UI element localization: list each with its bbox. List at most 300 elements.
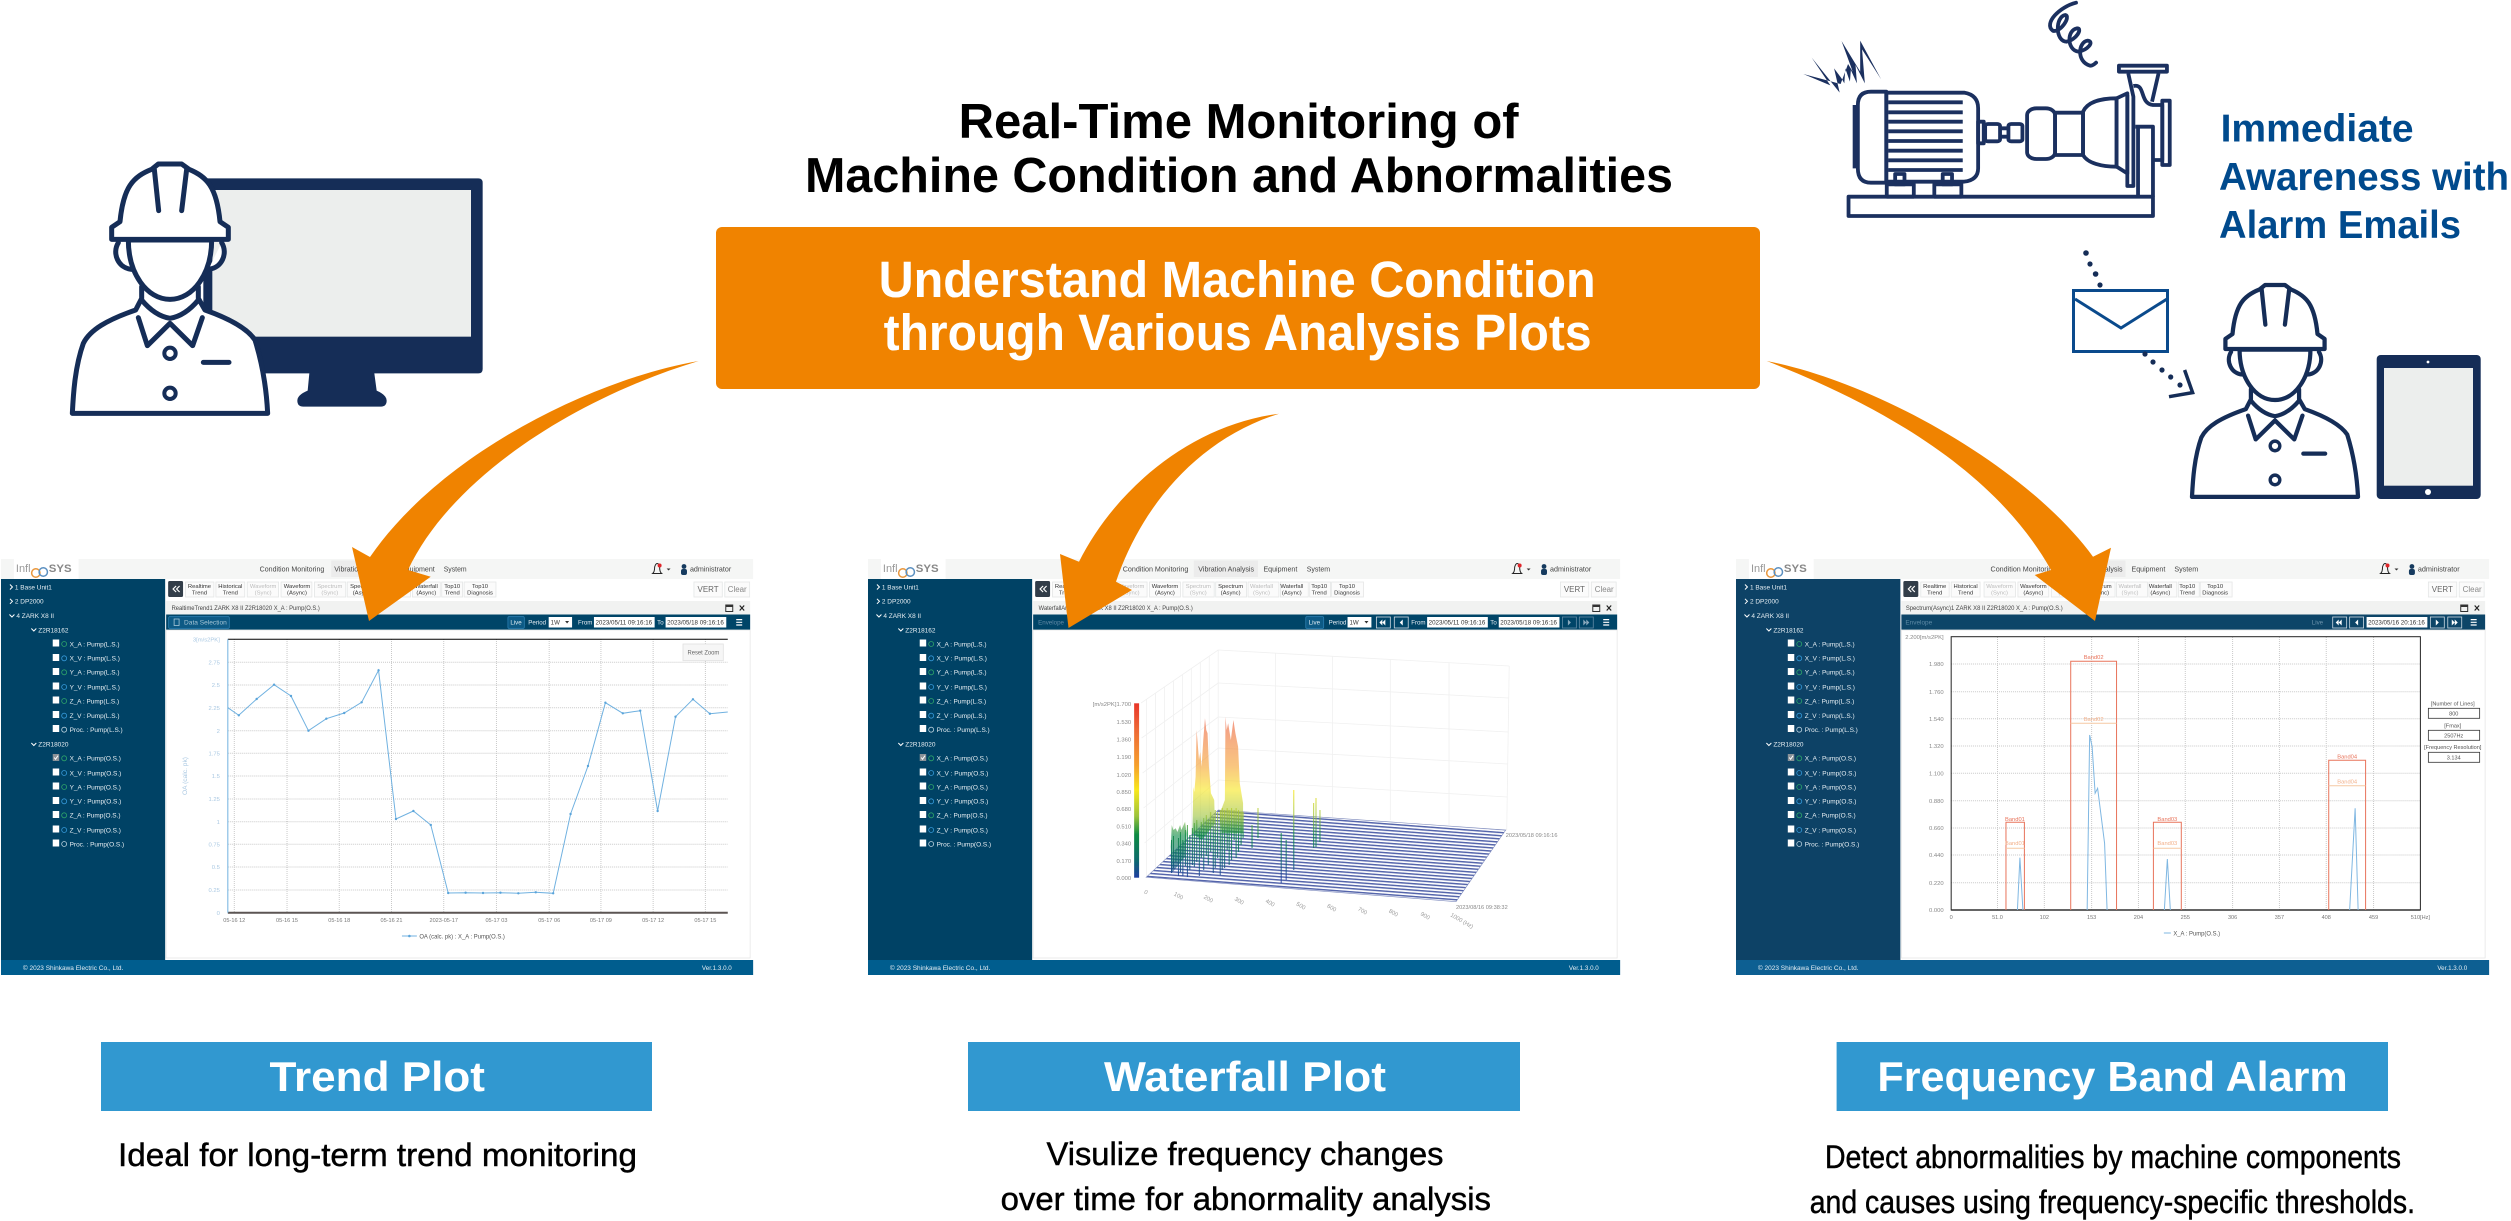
toolbar: Historical — [1085, 584, 1109, 590]
y axis labels: 0.440 — [1929, 853, 1944, 859]
footer bar — [868, 960, 1620, 975]
sidebar tree: Y_V : Pump(O.S.) — [1805, 799, 1856, 806]
toolbar: Trend — [1059, 590, 1074, 597]
sidebar tree: X_V : Pump(L.S.) — [70, 656, 120, 663]
toolbar: Trend — [1312, 590, 1327, 597]
toolbar: Waterfall — [1250, 584, 1273, 590]
toolbar: VERT — [2432, 585, 2453, 594]
y axis labels: 1.760 — [1929, 690, 1944, 696]
x axis labels — [223, 918, 716, 924]
sidebar tree: Proc. : Pump(O.S.) — [70, 841, 124, 848]
chart legend: OA (calc. pk) : X_A : Pump(O.S.) — [419, 933, 505, 941]
frequency labels — [1143, 890, 1474, 930]
toolbar: (Async) — [1221, 590, 1241, 597]
control bar: 2023/05/16 20:16:16 — [2368, 619, 2425, 627]
icon: worker at monitor — [72, 164, 483, 413]
toolbar: Spectrum — [1218, 584, 1243, 590]
toolbar: Waveform — [2020, 584, 2047, 590]
toolbar: Trend — [445, 590, 460, 597]
sidebar tree: X_A : Pump(L.S.) — [937, 641, 986, 648]
toolbar — [1035, 581, 1616, 597]
panel: trend plot screenshot — [1, 559, 753, 975]
sidebar tree: Z2R18162 — [1773, 627, 1804, 634]
control bar: From — [1411, 619, 1426, 627]
toolbar: Historical — [1954, 584, 1978, 590]
window title row: WaterfallAnalysis1 ZARK X8 II Z2R18020 X_A : Pump(O.S.) — [1039, 605, 1193, 612]
toolbar: Waterfall — [2149, 584, 2172, 590]
y axis labels: 0.25 — [208, 888, 221, 894]
toolbar: Diagnosis — [467, 590, 493, 597]
x axis labels: 153 — [2087, 915, 2096, 921]
sidebar tree: Y_A : Pump(O.S.) — [937, 784, 988, 791]
app header: Vibration Analysis — [334, 566, 391, 574]
title: Machine Condition and Abnormalities — [805, 148, 1673, 203]
app header: SYS — [1784, 563, 1807, 575]
toolbar: Top10 — [1311, 584, 1328, 590]
sidebar tree: Proc. : Pump(L.S.) — [937, 727, 990, 734]
x axis labels: 459 — [2369, 915, 2378, 921]
control bar: 1W — [1350, 619, 1359, 627]
icon: noisy pump machine — [1803, 3, 2170, 216]
toolbar: (Sync) — [1253, 590, 1270, 597]
frequency labels: 1000 (Hz) — [1449, 913, 1474, 930]
y axis labels: 0 — [217, 911, 221, 917]
sidebar tree: Y_V : Pump(L.S.) — [70, 684, 120, 691]
app header: SYS — [916, 563, 939, 575]
panel: waterfall plot screenshot — [868, 559, 1620, 975]
value labels: 0.340 — [1116, 842, 1132, 848]
y axis labels: 1.980 — [1929, 662, 1944, 668]
sidebar tree: X_A : Pump(L.S.) — [70, 641, 119, 648]
x axis labels: 05-16 12 — [223, 918, 245, 924]
3D waterfall chart — [1033, 630, 1617, 958]
app header: administrator — [1550, 566, 1592, 574]
y axis labels: 1.540 — [1929, 717, 1944, 723]
y axis labels: 0.220 — [1929, 881, 1944, 887]
control bar: Live — [1309, 619, 1321, 627]
arrow: to trend plot — [352, 361, 699, 621]
toolbar — [168, 581, 750, 597]
value labels: 0.850 — [1116, 790, 1132, 796]
toolbar — [1903, 581, 2484, 597]
icon: tablet — [2377, 355, 2481, 499]
app header: Equipment — [2131, 566, 2165, 574]
toolbar: Diagnosis — [2202, 590, 2228, 597]
control bar — [166, 614, 750, 630]
toolbar: (Sync) — [1991, 590, 2008, 597]
app header: Condition Monitoring — [1991, 566, 2056, 574]
alarm bands — [2005, 655, 2366, 910]
floor grid — [1146, 810, 1506, 902]
footer bar: Ver.1.3.0.0 — [702, 965, 732, 972]
control bar: Period — [528, 619, 547, 627]
sidebar tree: Z_A : Pump(L.S.) — [70, 698, 119, 705]
app header: Vibration Analysis — [2067, 566, 2123, 574]
window title row: Spectrum(Async)1 ZARK X8 II Z2R18020 X_A : Pump(O.S.) — [1906, 605, 2063, 612]
sidebar tree: Z2R18162 — [38, 627, 69, 634]
toolbar: Realtime — [188, 584, 211, 590]
control bar: Envelope — [1905, 619, 1933, 627]
frequency labels: 500 — [1295, 902, 1306, 912]
control bar: To — [657, 619, 664, 627]
y axis labels — [193, 637, 221, 917]
frequency labels: 400 — [1264, 899, 1275, 909]
toolbar: Realtime — [1055, 584, 1078, 590]
toolbar: Waveform — [1152, 584, 1178, 590]
heading: waterfall plot — [968, 1042, 1520, 1111]
app header: System — [1307, 566, 1330, 574]
x axis labels — [1950, 915, 2430, 921]
toolbar: Clear — [1595, 585, 1614, 594]
control bar: 2023/05/18 09:16:16 — [1500, 619, 1558, 627]
x axis labels: 2023-05-17 — [429, 918, 458, 924]
y axis labels: 0.75 — [208, 842, 221, 849]
y axis labels: 1.320 — [1929, 744, 1944, 750]
y axis labels: 2.200[m/s2PK] — [1905, 635, 1944, 641]
toolbar: (Async) — [287, 590, 307, 597]
x axis labels: 05-16 21 — [381, 918, 402, 924]
sidebar tree: Proc. : Pump(L.S.) — [1805, 727, 1858, 734]
spectrum info boxes: [Number of Lines] — [2431, 701, 2475, 708]
frequency labels: 700 — [1356, 907, 1368, 917]
sidebar tree: Z2R18020 — [1773, 742, 1804, 749]
sidebar tree: 4 ZARK X8 II — [1751, 613, 1789, 620]
sidebar tree: Z_A : Pump(L.S.) — [1805, 698, 1854, 705]
heading: trend plot — [101, 1042, 652, 1111]
value labels: 1.360 — [1116, 737, 1132, 744]
toolbar: (Async) — [353, 590, 373, 597]
x axis labels: 05-17 09 — [590, 918, 612, 924]
value labels: 1.020 — [1116, 773, 1132, 779]
icon: spring vibration squiggle — [2050, 3, 2096, 66]
toolbar: Historical — [218, 584, 242, 590]
toolbar: Waterfall — [1280, 584, 1303, 590]
footer bar: © 2023 Shinkawa Electric Co., Ltd. — [1758, 964, 1859, 972]
sidebar tree: Proc. : Pump(O.S.) — [1805, 841, 1859, 848]
sidebar tree: 1 Base Unit1 — [15, 584, 52, 591]
frequency labels: 300 — [1233, 897, 1244, 907]
y axis labels: 2 — [217, 729, 220, 735]
sidebar tree: Y_A : Pump(L.S.) — [1805, 670, 1855, 677]
x axis labels: 05-17 15 — [694, 918, 716, 924]
sidebar tree: 4 ZARK X8 II — [883, 613, 921, 620]
sidebar tree: X_A : Pump(O.S.) — [1805, 756, 1856, 763]
alarm bands: Band04 — [2337, 754, 2358, 761]
description: frequency band alarm — [1810, 1139, 2415, 1220]
spectrum lines — [2017, 735, 2358, 910]
app header: SYS — [49, 563, 72, 575]
heading: alarm emails — [2219, 108, 2509, 247]
toolbar: (Sync) — [2122, 590, 2139, 597]
sidebar tree: 1 Base Unit1 — [882, 584, 919, 591]
orange callout box — [716, 227, 1760, 389]
sidebar tree — [1, 579, 165, 960]
sidebar tree: Z_V : Pump(O.S.) — [70, 827, 121, 834]
title — [805, 94, 1673, 203]
reset zoom button: Reset Zoom — [687, 650, 719, 657]
alarm bands: Band03 — [2157, 841, 2177, 847]
toolbar: VERT — [698, 585, 719, 594]
sidebar tree: 2 DP2000 — [1750, 599, 1779, 606]
sidebar tree: 2 DP2000 — [15, 599, 44, 606]
value labels: 0.000 — [1116, 876, 1132, 882]
arrow: dotted path to worker — [2142, 351, 2193, 397]
toolbar: Waveform — [1118, 584, 1144, 590]
frequency labels: 600 — [1326, 904, 1337, 914]
x axis labels: 102 — [2040, 915, 2049, 921]
heading: alarm emails: Alarm Emails — [2219, 204, 2461, 247]
toolbar: Spectrum — [317, 584, 342, 590]
app header: Condition Monitoring — [1123, 566, 1189, 574]
y axis labels: 2.25 — [208, 706, 221, 712]
sidebar tree: Z_A : Pump(O.S.) — [937, 813, 988, 820]
y axis labels: 0.5 — [212, 865, 221, 871]
app header: System — [444, 566, 467, 574]
y axis labels: 1.5 — [212, 774, 221, 780]
y axis labels: 2.5 — [212, 683, 221, 689]
sidebar tree: X_A : Pump(O.S.) — [937, 756, 988, 763]
toolbar: Waveform — [1986, 584, 2013, 590]
arrow: to frequency band alarm — [1767, 361, 2111, 621]
y axis labels: 0.880 — [1929, 799, 1944, 805]
spectral spikes — [1171, 790, 1320, 883]
orange callout box: Understand Machine Condition — [879, 251, 1596, 308]
x axis labels: 05-17 12 — [642, 918, 664, 924]
alarm bands: Band01 — [2005, 841, 2025, 847]
app header: administrator — [2418, 566, 2460, 574]
sidebar tree: Z_V : Pump(L.S.) — [70, 713, 119, 720]
value labels: 1.190 — [1116, 755, 1132, 761]
sidebar tree: X_V : Pump(O.S.) — [1805, 770, 1856, 777]
sidebar tree: Z_V : Pump(L.S.) — [937, 713, 986, 720]
toolbar: Top10 — [2179, 584, 2196, 590]
surface peaks — [1171, 717, 1243, 873]
toolbar: (Async) — [1155, 590, 1175, 597]
control bar: Envelope — [1038, 619, 1065, 627]
sidebar tree: X_A : Pump(L.S.) — [1805, 641, 1855, 648]
description: trend plot: Ideal for long-term trend monitoring — [118, 1137, 637, 1173]
sidebar tree: Y_A : Pump(O.S.) — [70, 784, 121, 791]
frequency labels: 900 — [1419, 912, 1430, 922]
value labels: 0.510 — [1116, 824, 1132, 831]
sidebar tree: Z_A : Pump(L.S.) — [937, 698, 986, 705]
x axis labels: 05-16 15 — [276, 918, 298, 924]
title: Real-Time Monitoring of — [959, 94, 1519, 149]
icon: desktop monitor — [203, 178, 483, 407]
date labels — [1456, 833, 1557, 911]
toolbar: (Sync) — [321, 590, 338, 597]
toolbar: VERT — [1564, 585, 1585, 594]
spectrum info boxes: [Frequency Resolution] — [2424, 745, 2482, 751]
value labels — [1093, 702, 1132, 882]
toolbar: Clear — [728, 585, 747, 594]
y axis labels: 1.75 — [208, 751, 221, 758]
toolbar: Trend — [1927, 590, 1942, 597]
footer bar: © 2023 Shinkawa Electric Co., Ltd. — [23, 964, 124, 972]
alarm bands: Band01 — [2005, 817, 2025, 823]
date labels: 2023/05/18 09:16:16 — [1506, 833, 1557, 839]
value labels: 0.680 — [1116, 807, 1132, 813]
spectrum info boxes: 2507Hz — [2444, 733, 2464, 740]
control bar: To — [1490, 619, 1497, 627]
app header: administrator — [690, 566, 732, 574]
icon: worker with tablet — [2192, 285, 2358, 497]
toolbar: Trend — [192, 590, 207, 597]
spectrum info boxes: 3.134 — [2447, 755, 2461, 762]
toolbar: Trend — [1958, 590, 1973, 597]
heading: frequency band alarm — [1837, 1042, 2388, 1111]
sidebar tree: Z_V : Pump(O.S.) — [937, 827, 988, 834]
toolbar: Diagnosis — [1334, 590, 1360, 597]
spectrum info boxes: [Fmax] — [2444, 723, 2462, 730]
x axis labels: 05-17 03 — [485, 918, 507, 924]
sidebar tree: Z_A : Pump(O.S.) — [70, 813, 121, 820]
toolbar: (Sync) — [255, 590, 272, 597]
control bar: 2023/05/18 09:16:16 — [667, 619, 724, 627]
sidebar tree: 4 ZARK X8 II — [16, 613, 54, 620]
trend line chart: OA (calc. pk) — [182, 757, 189, 795]
sidebar tree: Z_V : Pump(L.S.) — [1805, 713, 1855, 720]
y axis labels: 0.000 — [1929, 908, 1944, 914]
toolbar: (Async) — [2023, 590, 2043, 597]
control bar: 2023/05/11 09:16:16 — [595, 619, 653, 627]
toolbar: Waterfall — [2119, 584, 2141, 590]
heading: frequency band alarm: Frequency Band Alarm — [1877, 1053, 2348, 1100]
toolbar: Realtime — [1923, 584, 1946, 590]
toolbar: (Async) — [2150, 590, 2170, 597]
app header: Equipment — [1263, 566, 1297, 574]
app header: System — [2174, 566, 2199, 574]
machine body — [1849, 66, 2170, 216]
y axis labels: 1 — [217, 820, 220, 826]
app header: Vibration Analysis — [1198, 566, 1255, 574]
icon: envelope — [2074, 290, 2168, 352]
toolbar: Clear — [2463, 585, 2482, 594]
x axis labels: 255 — [2181, 915, 2190, 921]
control bar: Period — [1329, 619, 1347, 627]
sidebar tree: Y_V : Pump(L.S.) — [1805, 684, 1855, 691]
x axis labels: 357 — [2275, 915, 2284, 921]
toolbar: Top10 — [472, 584, 489, 590]
sidebar tree: Z2R18020 — [905, 742, 936, 749]
heading: alarm emails: Awareness with — [2219, 156, 2509, 199]
toolbar: Waterfall — [384, 584, 406, 590]
app header: Infl — [1751, 563, 1766, 575]
toolbar: (Sync) — [1123, 590, 1140, 597]
toolbar: (Async) — [416, 590, 436, 597]
sidebar tree: X_V : Pump(L.S.) — [1805, 656, 1855, 663]
window title row: RealtimeTrend1 ZARK X8 II Z2R18020 X_A : Pump(O.S.) — [172, 605, 320, 612]
alarm bands: Band04 — [2337, 779, 2358, 786]
sidebar tree: Y_A : Pump(L.S.) — [937, 670, 986, 677]
icon: worker — [72, 164, 268, 413]
toolbar: Spectrum — [1186, 584, 1211, 590]
window title row — [166, 601, 750, 614]
footer bar: Ver.1.3.0.0 — [2437, 965, 2468, 972]
toolbar: Top10 — [2207, 584, 2224, 590]
sidebar tree: Z_V : Pump(O.S.) — [1805, 827, 1856, 834]
frequency labels: 800 — [1387, 909, 1399, 919]
x axis labels: 408 — [2322, 915, 2331, 921]
orange callout box: through Various Analysis Plots — [884, 304, 1592, 361]
spectrum info boxes: 800 — [2449, 711, 2458, 718]
sidebar tree: 1 Base Unit1 — [1750, 584, 1787, 591]
toolbar: Trend — [2180, 590, 2195, 597]
heading: trend plot: Trend Plot — [270, 1053, 485, 1100]
y axis labels: 1.25 — [208, 797, 221, 803]
icon: dotted path into envelope — [2083, 250, 2103, 288]
sidebar tree — [868, 579, 1032, 960]
footer bar: Ver.1.3.0.0 — [1569, 965, 1599, 972]
reset zoom button — [683, 644, 723, 661]
sidebar tree: X_V : Pump(L.S.) — [937, 656, 987, 663]
sidebar tree: Y_A : Pump(O.S.) — [1805, 784, 1856, 791]
sidebar tree — [1736, 579, 1900, 960]
description: waterfall plot — [1001, 1136, 1491, 1217]
toolbar: Spectrum — [350, 584, 375, 590]
footer bar — [1, 960, 753, 975]
chart legend: X_A : Pump(O.S.) — [2173, 930, 2220, 938]
y axis labels: 2.75 — [208, 660, 221, 667]
spectrum info boxes — [2424, 701, 2482, 762]
control bar: 2023/05/11 09:16:16 — [1429, 619, 1486, 627]
y axis labels: 3[m/s2PK] — [193, 637, 220, 644]
x axis labels: 306 — [2228, 915, 2237, 921]
alarm bands: Band03 — [2157, 817, 2177, 823]
chart walls — [1141, 650, 1509, 877]
control bar — [1033, 614, 1617, 630]
window title row — [1901, 601, 2485, 614]
app header — [868, 559, 1620, 579]
toolbar: (Sync) — [2058, 590, 2075, 597]
toolbar: Waveform — [284, 584, 310, 590]
toolbar: Spectrum — [2054, 584, 2079, 590]
app header — [1736, 559, 2489, 579]
x axis labels: 51.0 — [1992, 915, 2003, 921]
alarm bands: Band02 — [2084, 717, 2104, 723]
sidebar tree: Z2R18020 — [38, 742, 69, 749]
sidebar tree: Proc. : Pump(L.S.) — [70, 727, 123, 734]
toolbar: Top10 — [1339, 584, 1356, 590]
description: frequency band alarm: and causes using frequency-specific thresholds. — [1810, 1184, 2415, 1220]
control bar: Live — [510, 619, 522, 627]
frequency labels: 0 — [1143, 890, 1148, 896]
control bar — [1901, 614, 2485, 630]
sidebar tree: Y_V : Pump(O.S.) — [937, 799, 988, 806]
description: waterfall plot: Visulize frequency changes — [1046, 1136, 1444, 1172]
x axis labels: 510[Hz] — [2411, 915, 2430, 921]
app header: Equipment — [401, 566, 435, 574]
date labels: 2023/08/16 09:38:32 — [1456, 905, 1508, 911]
frequency labels: 200 — [1202, 895, 1214, 905]
sidebar tree: 2 DP2000 — [882, 599, 911, 606]
app header: Infl — [883, 563, 898, 575]
sidebar tree: Z_A : Pump(O.S.) — [1805, 813, 1856, 820]
description: waterfall plot: over time for abnormality analysis — [1001, 1181, 1491, 1217]
toolbar: Waterfall — [415, 584, 438, 590]
app header — [1, 559, 753, 579]
y axis labels: 0.660 — [1929, 826, 1944, 832]
control bar: From — [578, 619, 592, 627]
control bar: 1W — [551, 619, 560, 627]
y axis labels: 1.100 — [1929, 771, 1944, 778]
value labels: 0.170 — [1116, 859, 1132, 865]
toolbar: (Async) — [1282, 590, 1302, 597]
spectrum chart — [1901, 630, 2485, 958]
control bar: Live — [2312, 619, 2324, 627]
toolbar: (Async) — [2089, 590, 2109, 597]
sidebar tree: Y_A : Pump(L.S.) — [70, 670, 119, 677]
